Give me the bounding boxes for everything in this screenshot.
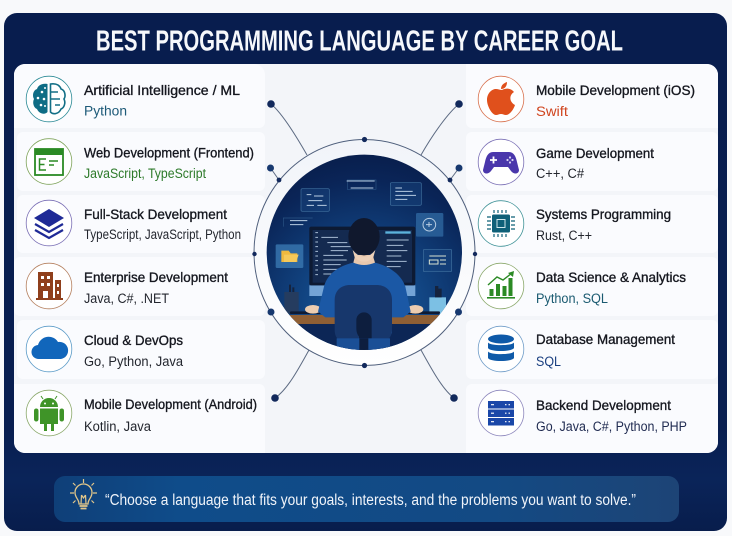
mug and pen cup [284,292,299,314]
card: Web Development (Frontend): Web Development (Frontend) [84,144,254,160]
card: Systems Programming: Systems Programming [536,206,671,222]
card: Cloud & DevOps [26,326,183,372]
card: Mobile Development (Android): Mobile Development (Android) [84,396,257,412]
icon: brain [26,76,72,122]
white content panel [14,64,718,453]
shirt [318,263,411,333]
scene [263,152,467,355]
icon: light bulb [70,479,97,508]
chair [335,285,392,343]
card: Game Development: C++, C# [536,166,584,181]
connector lines and dots [267,100,463,402]
card: Database Management: Database Management [536,331,675,347]
floating panels [276,180,452,272]
left column cards [14,64,265,453]
card: Cloud & DevOps: Go, Python, Java [84,354,183,369]
central illustration: developer at desk [252,137,477,368]
card: Database Management: SQL [536,354,561,369]
monitor [309,285,415,296]
hands [305,305,321,314]
card: Cloud & DevOps: Cloud & DevOps [84,332,183,348]
card: Mobile Development (iOS): Mobile Development (iOS) [536,82,695,98]
icon: code window [26,139,72,184]
card: Enterprise Development: Enterprise Development [84,269,228,285]
icon: cloud [26,326,72,372]
icon: layers [26,200,72,246]
card: Backend Development: Go, Java, C#, Python, PHP [536,419,687,434]
icon: microchip [478,201,524,246]
card: Artificial Intelligence / ML: Python [84,104,127,118]
card: Full-Stack Development: TypeScript, JavaScript, Python [84,227,241,242]
card: Data Science & Analytics: Data Science & Analytics [536,269,686,285]
outer ring [252,137,477,368]
head [348,218,380,255]
card: Game Development: Game Development [536,145,654,161]
right column cards [466,64,718,453]
icon: game controller [478,139,524,185]
icon: database cylinder [478,326,524,372]
icon: apple [478,76,524,122]
card: Web Development (Frontend) [26,139,254,184]
card: Backend Development [478,390,687,436]
card: Game Development [478,139,654,185]
quote banner [54,476,679,522]
icon: growth chart [478,263,524,309]
card: Database Management [478,326,675,372]
card: Systems Programming [478,201,671,246]
quote banner: “Choose a language that fits your goals, interests, and the problems you want to solve.” [105,492,636,509]
card: Systems Programming: Rust, C++ [536,228,592,243]
card: Mobile Development (Android) [26,390,257,436]
card: Data Science & Analytics: Python, SQL [536,291,608,306]
card: Backend Development: Backend Development [536,397,671,413]
icon: android robot [26,390,72,436]
card: Enterprise Development [26,263,228,309]
card: Data Science & Analytics [478,263,686,309]
card: Enterprise Development: Java, C#, .NET [84,291,169,306]
card: Artificial Intelligence / ML: Artificial Intelligence / ML [84,82,240,98]
card: Web Development (Frontend): JavaScript, TypeScript [84,166,206,181]
card: Full-Stack Development: Full-Stack Development [84,206,227,222]
card: Full-Stack Development [26,200,241,246]
card: Mobile Development (iOS) [478,76,695,122]
desk [290,315,440,324]
card: Artificial Intelligence / ML [26,76,240,122]
card: Mobile Development (iOS): Swift [536,104,568,119]
icon: server rack [478,390,524,436]
card: Mobile Development (Android): Kotlin, Java [84,419,151,434]
icon: office building [26,263,72,309]
